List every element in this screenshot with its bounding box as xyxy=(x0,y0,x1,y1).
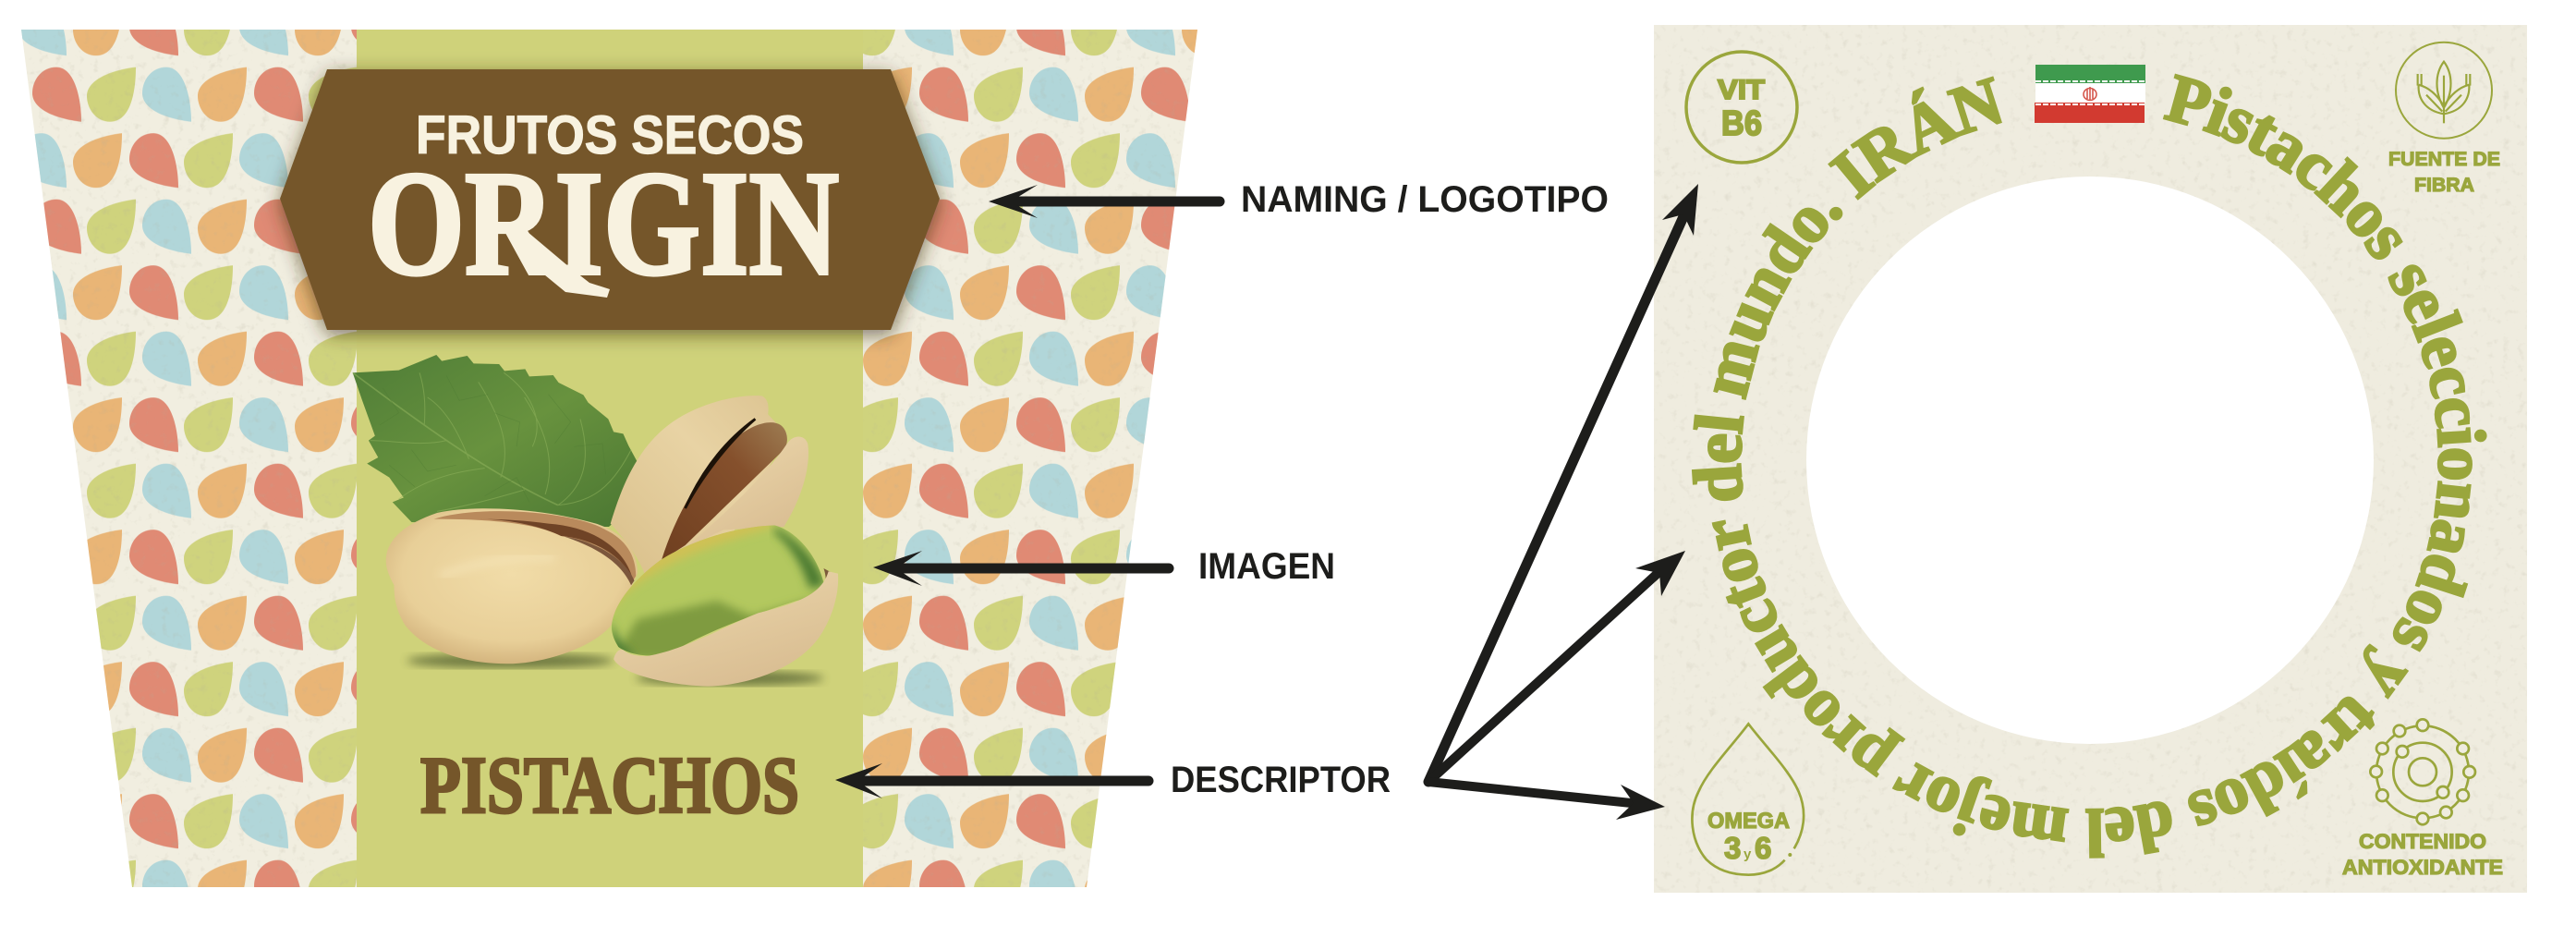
label: imagen: IMAGEN xyxy=(1198,546,1335,587)
icon: omega drop: OMEGA xyxy=(1707,809,1790,834)
panel: label top circle xyxy=(1620,25,2527,893)
icon: vitamin B6 badge: VIT xyxy=(1718,75,1765,105)
icon: antioxidant molecule: CONTENIDO xyxy=(2359,830,2486,853)
arrow: imagen xyxy=(873,551,1169,586)
paper background xyxy=(1654,25,2527,893)
icon: omega drop: 3 xyxy=(1724,831,1741,865)
label: descriptor: DESCRIPTOR xyxy=(1171,760,1391,800)
icon: fibre source xyxy=(2388,43,2500,196)
arrow: naming / logotipo xyxy=(989,185,1220,218)
arrow to vitamin badge xyxy=(1428,184,1698,782)
icon: omega drop xyxy=(1692,724,1804,875)
arrow to omega drop xyxy=(1428,782,1665,820)
icon: antioxidant molecule: ANTIOXIDANTE xyxy=(2342,856,2503,879)
icon: flag of Iran xyxy=(2035,65,2145,123)
descriptor: PISTACHOS xyxy=(420,741,799,831)
central hole xyxy=(1806,177,2374,744)
icon: fibre source: FUENTE DE xyxy=(2388,149,2500,170)
icon: vitamin B6 badge: B6 xyxy=(1721,104,1762,143)
panel: packaging label front xyxy=(0,0,1220,924)
icon: fibre source: FIBRA xyxy=(2414,175,2474,196)
arrow to curved text xyxy=(1428,551,1685,782)
pistachio: bottom shell xyxy=(614,568,838,687)
icon: omega drop: y xyxy=(1744,846,1752,862)
icon: omega drop: 6 xyxy=(1755,831,1771,865)
arrows: descriptor fan to label top xyxy=(1428,184,1698,820)
arrow: descriptor left xyxy=(835,763,1148,798)
brown hexagon xyxy=(280,69,940,330)
brand line: FRUTOS SECOS xyxy=(416,105,804,165)
central green band xyxy=(357,30,863,887)
logotype: ORIGIN xyxy=(368,141,839,307)
curved descriptor text: Pistachos seleccionados y traídos del mejor productor del mundo. IRÁN xyxy=(1691,74,2487,859)
logo banner xyxy=(280,69,940,330)
paper background with leaf pattern xyxy=(21,30,1197,887)
icon: antioxidant molecule xyxy=(2342,719,2503,879)
pistachio: closed shell xyxy=(386,508,638,664)
label: naming / logotipo: NAMING / LOGOTIPO xyxy=(1241,179,1609,220)
leaf xyxy=(353,355,639,527)
pistachio shadows xyxy=(407,653,823,686)
pistachio: green kernel xyxy=(612,525,824,656)
icon: vitamin B6 badge xyxy=(1686,52,1797,163)
pistachio: open shell with brown nut xyxy=(611,396,808,576)
image: leaf and pistachios xyxy=(353,355,838,687)
